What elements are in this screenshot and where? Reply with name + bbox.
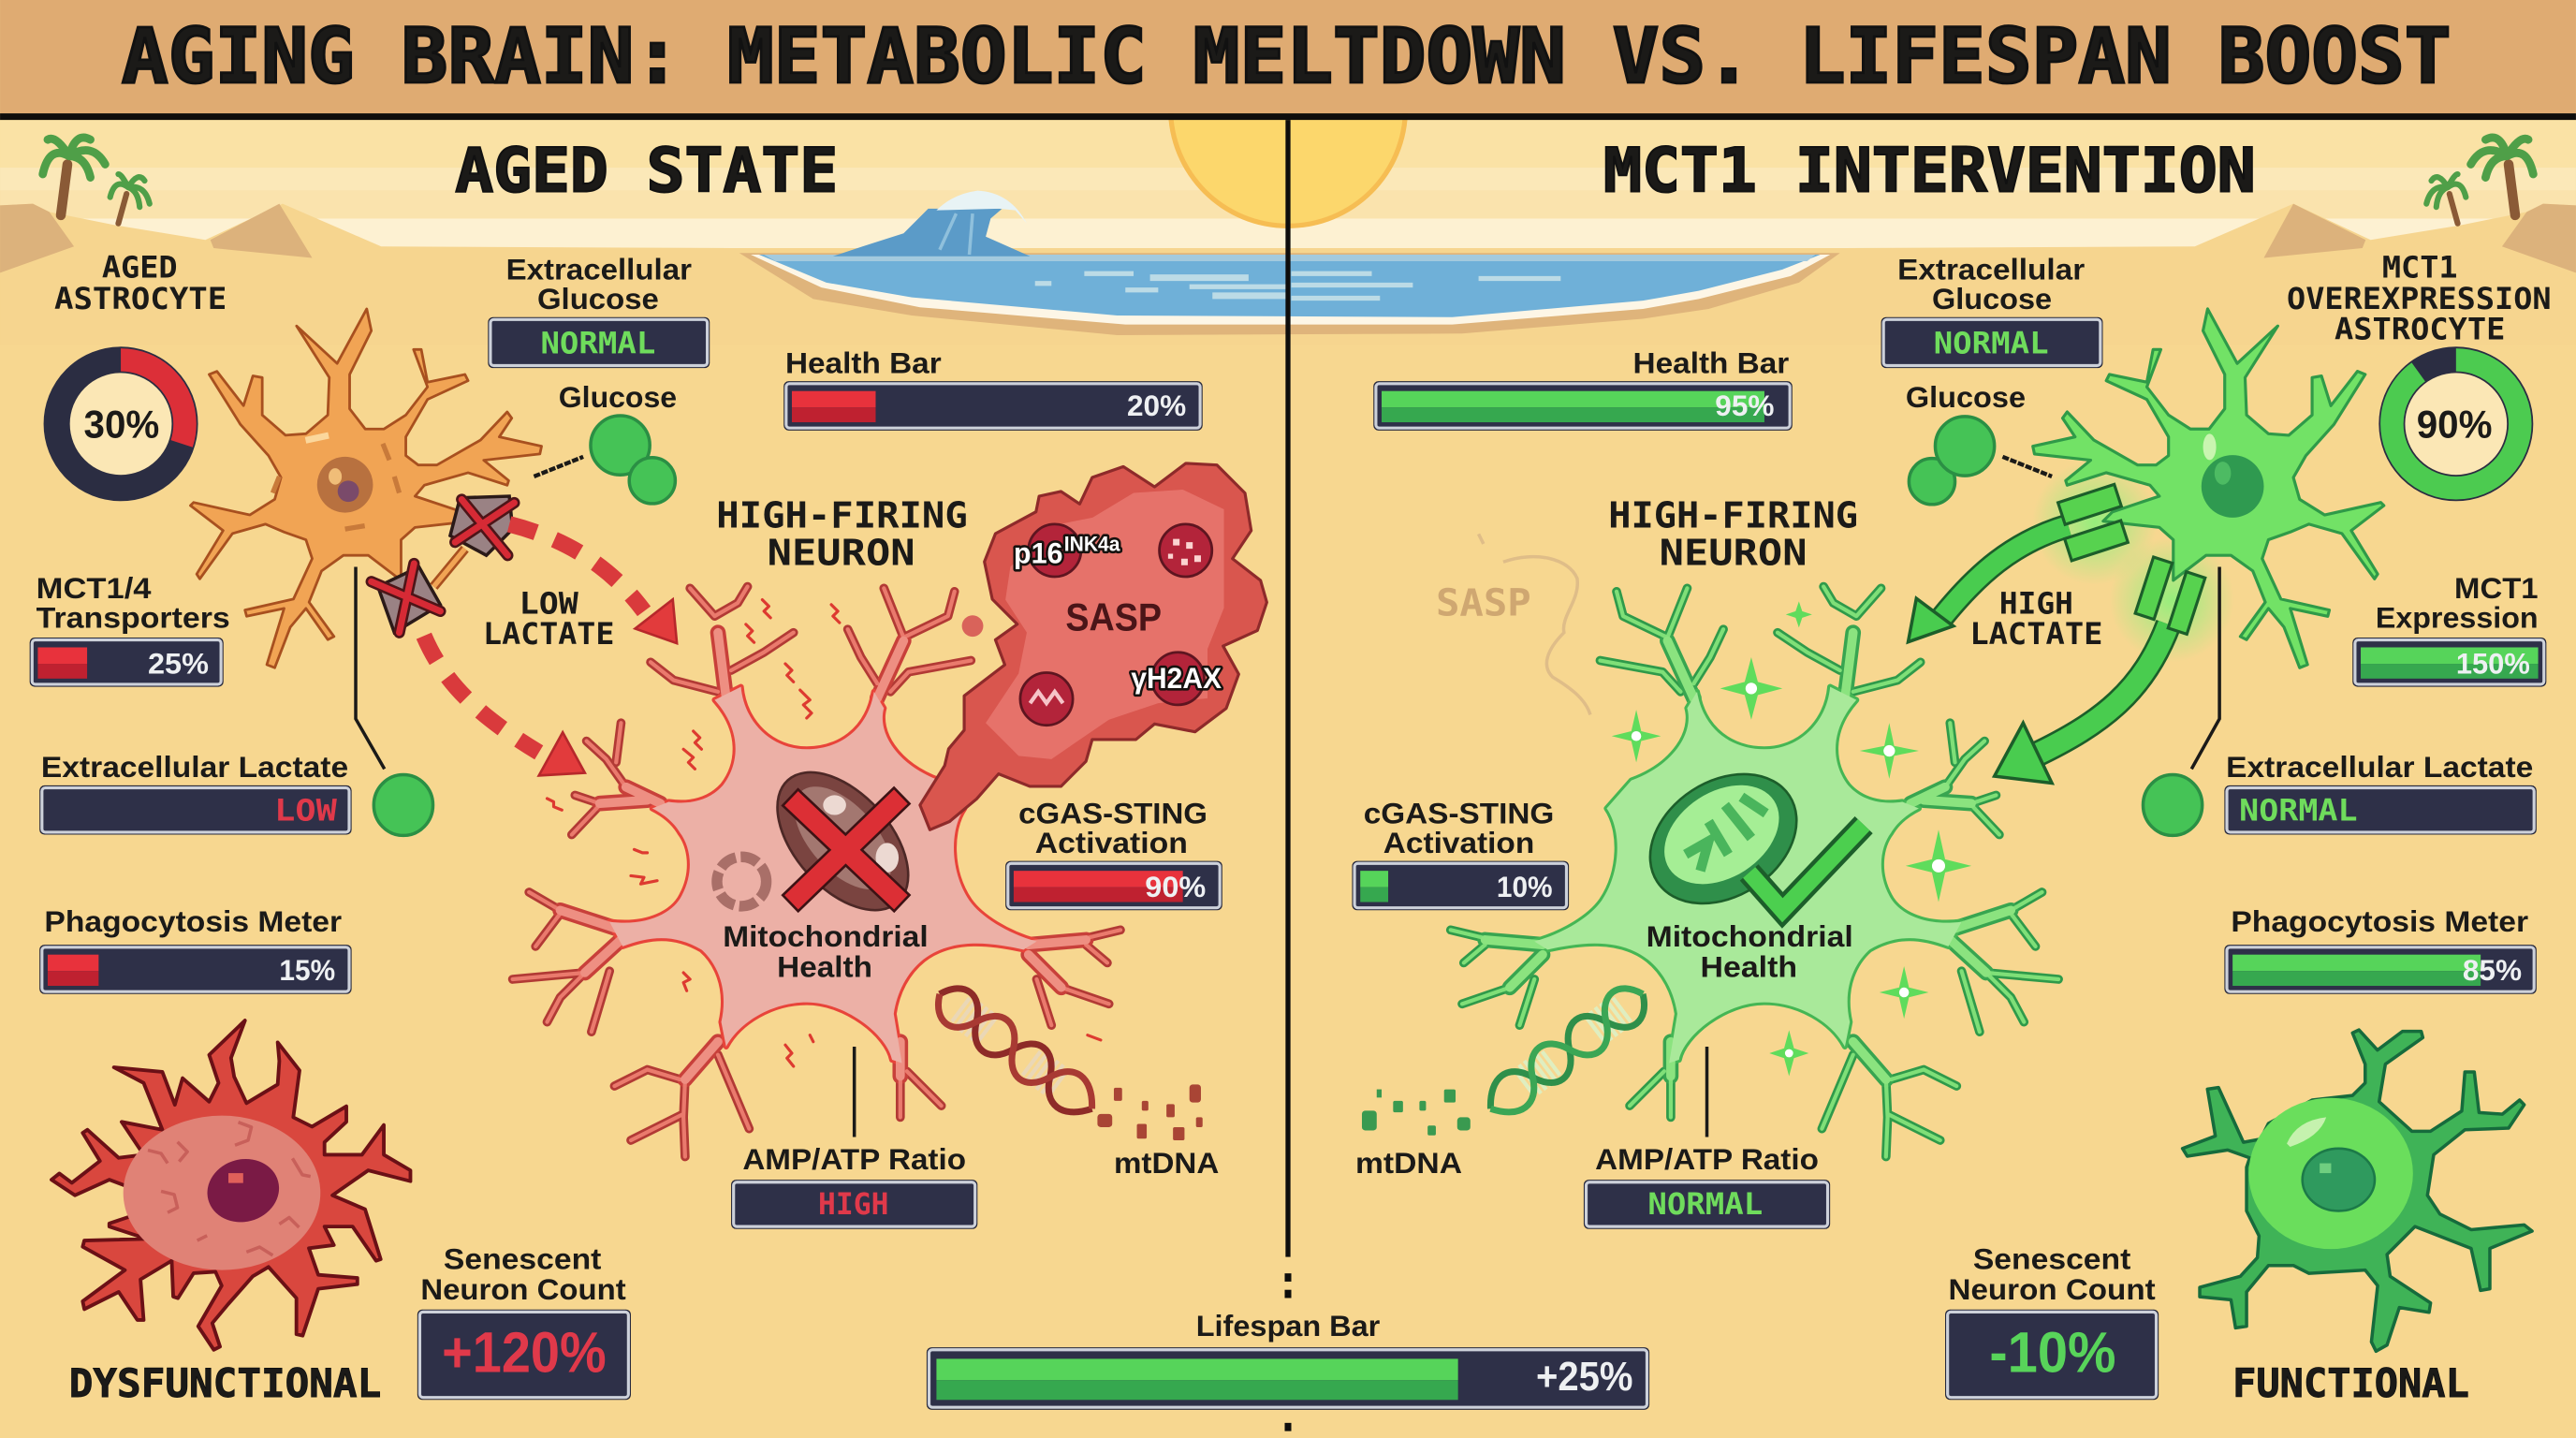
- label: mitochondrial health left: Mitochondrial: [723, 919, 929, 953]
- palm trees left: [43, 138, 150, 224]
- arrow: low lactate upper dashed: [509, 524, 677, 643]
- donut: astrocyte 90%: [2392, 360, 2520, 488]
- meter: phagocytosis 85%: [2224, 945, 2537, 994]
- label: mct1 overexpression astrocyte: MCT1: [2382, 252, 2458, 286]
- stat box: +120%: +120%: [442, 1320, 607, 1385]
- label: amp/atp ratio left: AMP/ATP Ratio: [742, 1142, 966, 1176]
- status: lactate normal: [2224, 785, 2537, 835]
- label: high-firing neuron right: HIGH-FIRING: [1608, 494, 1858, 536]
- background sky: [0, 120, 2576, 258]
- sparkles: [1612, 601, 1971, 1077]
- label: low lactate: LOW: [520, 587, 579, 621]
- label: mitochondrial health left: [723, 919, 929, 983]
- meter: mct1 expression 150%: [2352, 638, 2546, 687]
- meter: cgas-sting 10%: [1352, 861, 1569, 910]
- dunes and beach: [0, 204, 2576, 345]
- sasp cloud: p16: [1014, 536, 1063, 570]
- label: mct1 overexpression astrocyte: ASTROCYTE: [2334, 313, 2505, 346]
- label: high lactate: LACTATE: [1969, 618, 2102, 652]
- label: extracellular glucose left: Glucose: [537, 282, 659, 315]
- neuron: aged red: [513, 587, 1120, 1157]
- meter: transporters 25%: 25%: [148, 647, 209, 681]
- transporter blocked upper: [450, 496, 514, 555]
- status: glucose normal right: NORMAL: [1934, 327, 2049, 360]
- label: aged astrocyte: AGED: [102, 252, 178, 286]
- status: lactate low: [39, 785, 352, 835]
- meter: cgas-sting 10%: 10%: [1497, 870, 1553, 903]
- sasp cloud: SASP: [1065, 594, 1162, 638]
- icon: glucose molecule right: [1909, 417, 2052, 505]
- label: mitochondrial health right: Mitochondrial: [1647, 919, 1853, 953]
- center divider: [1284, 120, 1292, 1431]
- faded sasp remnant: SASP: [1436, 580, 1531, 624]
- status: lactate normal: NORMAL: [2239, 795, 2358, 829]
- label: mitochondrial health right: Health: [1701, 949, 1797, 983]
- label: health bar left: Health Bar: [785, 345, 942, 379]
- heading: mct1 intervention: MCT1 INTERVENTION: [1603, 136, 2256, 206]
- label: glucose right: Glucose: [1906, 380, 2026, 414]
- label: low lactate: LACTATE: [483, 618, 614, 652]
- meter: health 20%: 20%: [1127, 389, 1186, 422]
- status: glucose normal left: NORMAL: [540, 327, 655, 360]
- label: mct1 expression: [2376, 571, 2539, 634]
- faded sasp remnant: [1436, 534, 1590, 714]
- label: high-firing neuron right: NEURON: [1660, 533, 1808, 575]
- meter: cgas-sting 90%: 90%: [1145, 870, 1206, 903]
- stat box: -10%: -10%: [1989, 1320, 2116, 1385]
- label: high-firing neuron left: [716, 494, 968, 575]
- sun: [1168, 0, 1408, 228]
- label: aged astrocyte: ASTROCYTE: [54, 283, 227, 316]
- status: amp/atp normal: [1584, 1180, 1830, 1229]
- meter: health 95%: 95%: [1715, 389, 1774, 422]
- label: mct1/4 transporters: MCT1/4: [37, 571, 152, 605]
- meter: transporters 25%: [30, 638, 224, 687]
- icon: mtdna fragments left: [1097, 1084, 1203, 1140]
- leader line and lactate molecule right: [2143, 566, 2219, 835]
- label: cgas-sting left: cGAS-STING: [1018, 796, 1208, 829]
- donut: astrocyte 90%: 90%: [2417, 403, 2492, 447]
- meter: health 95%: [1373, 381, 1793, 431]
- heading: aged state: AGED STATE: [455, 136, 838, 206]
- donut: astrocyte 30%: 30%: [84, 403, 159, 447]
- label: mct1 expression: Expression: [2376, 600, 2539, 634]
- sasp cloud: γH2AX: [1131, 661, 1222, 695]
- label: senescent neuron count left: Senescent: [444, 1242, 602, 1276]
- label: high lactate: HIGH: [1999, 587, 2073, 621]
- label: mct1/4 transporters: Transporters: [37, 600, 230, 634]
- meter: phagocytosis 15%: [39, 945, 352, 994]
- glow: transporters: [2032, 460, 2234, 662]
- label: senescent neuron count left: [420, 1242, 626, 1306]
- label: cgas-sting left: [1018, 796, 1208, 859]
- label: mct1/4 transporters: [37, 571, 230, 634]
- label: cgas-sting right: Activation: [1383, 826, 1534, 859]
- label: phagocytosis meter left: Phagocytosis Meter: [44, 904, 342, 938]
- stat box: +120%: [417, 1310, 631, 1400]
- label: health bar right: Health Bar: [1633, 345, 1789, 379]
- label: cgas-sting left: Activation: [1035, 826, 1188, 859]
- label: high-firing neuron left: HIGH-FIRING: [716, 494, 968, 536]
- status: amp/atp high: [731, 1180, 977, 1229]
- transporter blocked lower: [372, 564, 440, 633]
- label: senescent neuron count right: [1949, 1242, 2156, 1306]
- meter: mct1 expression 150%: 150%: [2456, 647, 2530, 681]
- label: mtdna right: mtDNA: [1355, 1146, 1462, 1180]
- label: low lactate: [483, 587, 614, 652]
- label: lifespan bar: Lifespan Bar: [1196, 1309, 1380, 1343]
- arrow: low lactate lower dashed: [424, 636, 585, 775]
- astrocyte: aged orange: [190, 309, 542, 668]
- icon: damaged mitochondrion with red x: [753, 748, 933, 934]
- icon: mtdna helix left: [928, 978, 1104, 1124]
- neuron: healthy green: [1451, 587, 2058, 1157]
- icon: broken mitochondrion ring: [717, 857, 767, 906]
- status: glucose normal right: [1881, 317, 2102, 368]
- label: extracellular lactate right: Extracellular Lactate: [2226, 750, 2533, 784]
- meter: phagocytosis 85%: 85%: [2463, 953, 2522, 987]
- meter: cgas-sting 90%: [1005, 861, 1222, 910]
- status: amp/atp high: HIGH: [818, 1188, 889, 1222]
- label: cgas-sting right: [1364, 796, 1554, 859]
- label: senescent neuron count right: Senescent: [1973, 1242, 2131, 1276]
- astrocyte: overexpression green: [2033, 309, 2384, 668]
- label: mct1 overexpression astrocyte: OVEREXPRESSION: [2287, 283, 2552, 316]
- label: mitochondrial health left: Health: [777, 949, 872, 983]
- transporters active: [2058, 484, 2205, 634]
- label: mtdna left: mtDNA: [1114, 1146, 1219, 1180]
- sasp cloud: [920, 463, 1266, 829]
- label: mitochondrial health right: [1647, 919, 1853, 983]
- wave: [833, 191, 1030, 257]
- status: glucose normal left: [488, 317, 710, 368]
- label: aged astrocyte: [54, 252, 227, 316]
- label: high lactate: [1969, 587, 2102, 652]
- title: AGING BRAIN: METABOLIC MELTDOWN VS. LIFESPAN BOOST: [122, 13, 2452, 101]
- arrow: high lactate lower: [1995, 624, 2169, 783]
- label: extracellular glucose right: Glucose: [1932, 282, 2052, 315]
- meter: phagocytosis 15%: 15%: [279, 953, 335, 987]
- sasp cloud: INK4a: [1064, 532, 1120, 555]
- arrow: high lactate upper: [1909, 526, 2069, 642]
- label: functional: FUNCTIONAL: [2232, 1360, 2469, 1406]
- label: mct1 expression: MCT1: [2454, 571, 2539, 605]
- donut: astrocyte 30%: [57, 360, 184, 488]
- label: extracellular glucose left: Extracellular: [506, 252, 692, 286]
- label: amp/atp ratio right: AMP/ATP Ratio: [1595, 1142, 1819, 1176]
- title band: [0, 0, 2576, 120]
- label: high-firing neuron right: [1608, 494, 1858, 575]
- label: mct1 overexpression astrocyte: [2287, 252, 2552, 346]
- label: glucose left: Glucose: [559, 380, 677, 414]
- status: lactate low: LOW: [274, 795, 338, 829]
- cell: functional microglia: [2183, 1030, 2532, 1351]
- icon: glucose molecule left: [534, 416, 675, 504]
- icon: mtdna fragments right: [1362, 1090, 1471, 1136]
- status: amp/atp normal: NORMAL: [1647, 1188, 1763, 1222]
- meter: lifespan +25%: [927, 1347, 1649, 1410]
- label: high-firing neuron left: NEURON: [768, 533, 915, 575]
- label: extracellular glucose left: [506, 252, 692, 315]
- label: extracellular lactate left: Extracellular Lactate: [41, 750, 348, 784]
- icon: mtdna helix right: [1479, 978, 1655, 1124]
- label: extracellular glucose right: Extracellular: [1897, 252, 2085, 286]
- meter: health 20%: [783, 381, 1203, 431]
- label: extracellular glucose right: [1897, 252, 2085, 315]
- label: dysfunctional: DYSFUNCTIONAL: [69, 1360, 381, 1406]
- leader line and lactate molecule left: [356, 566, 433, 835]
- stat box: -10%: [1945, 1310, 2159, 1400]
- ocean: [739, 253, 1840, 335]
- label: cgas-sting right: cGAS-STING: [1364, 796, 1554, 829]
- meter: lifespan +25%: +25%: [1536, 1354, 1633, 1400]
- label: phagocytosis meter right: Phagocytosis Meter: [2231, 904, 2528, 938]
- palm trees right: [2426, 138, 2533, 224]
- icon: healthy mitochondrion with check: [1626, 748, 1864, 930]
- label: senescent neuron count left: Neuron Count: [420, 1272, 626, 1306]
- label: senescent neuron count right: Neuron Count: [1949, 1272, 2156, 1306]
- cell: dysfunctional microglia: [51, 1020, 410, 1350]
